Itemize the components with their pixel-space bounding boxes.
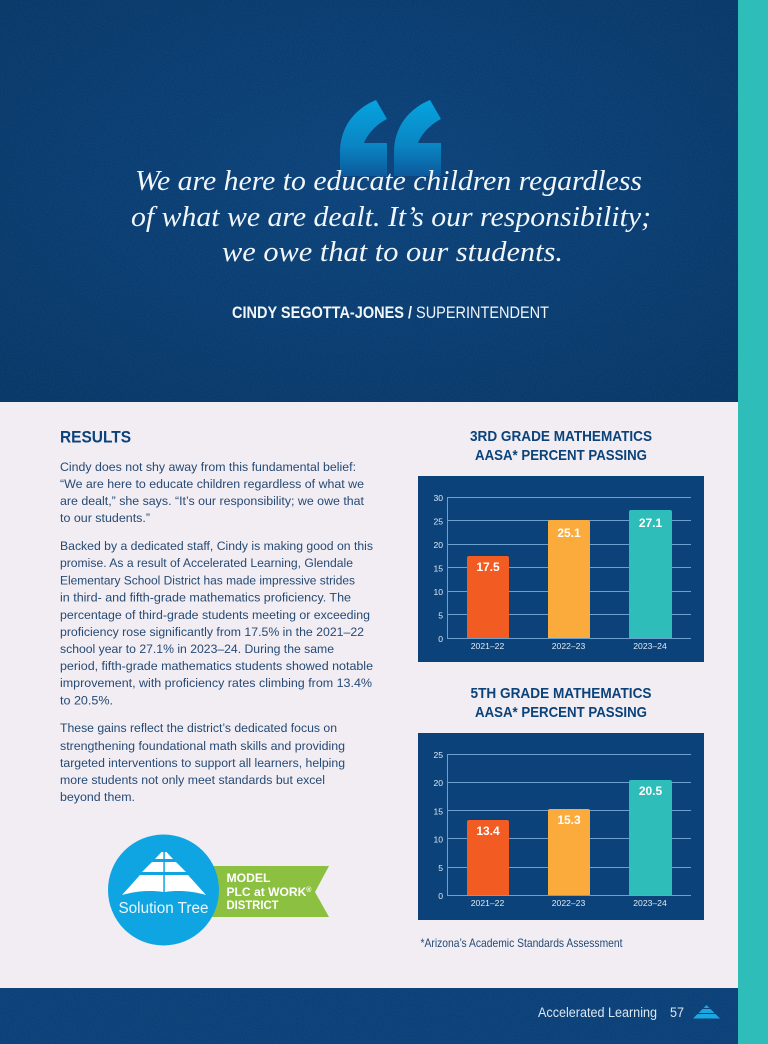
quote text: we owe that to our students. [222,236,563,268]
text block: results body: are dealt,” she says. “It’s our responsibility; we owe that [60,494,365,508]
text block: results body: more students not only meet standards but excel [60,773,325,787]
text block: results body: school year to 27.1% in 2023–24. During the same [60,642,334,656]
ribbon text: DISTRICT [226,898,279,912]
bar: 2023–24 [629,780,672,895]
bar: 2022–23: 15.3 [557,813,581,827]
blue circle [108,834,219,946]
bar: 2023–24: 27.1 [639,516,663,530]
text block: results body: “We are here to educate children regardless of what we [60,477,364,491]
text block: results body: promise. As a result of Accelerated Learning, Glendale [60,556,353,570]
bar chart: 3rd grade: 5 [438,610,443,620]
text block: results body: percentage of third-grade students meeting or exceeding [60,608,370,622]
bar: 2021–22: 17.5 [476,560,500,574]
text block: results body: improvement, with proficiency rates climbing from 13.4% [60,676,372,690]
text block: results body: in third- and fifth-grade mathematics proficiency. The [60,590,351,604]
bar chart: 3rd grade: 20 [433,540,443,550]
bar chart: 5th grade: 5 [438,863,443,873]
bar chart: 3rd grade: 2023–24 [633,641,667,651]
heading: 5th grade chart: 5TH GRADE MATHEMATICS [470,685,652,702]
text block: results body: to our students.” [60,511,150,525]
quote text: We are here to educate children regardless [135,165,642,197]
text block: results body: beyond them. [60,790,135,804]
teal side band [738,0,768,1044]
heading: 3rd grade chart: AASA* PERCENT PASSING [475,447,647,464]
bar chart: 3rd grade [418,476,704,662]
text block: results body: Cindy does not shy away from this fundamental belief: [60,460,356,474]
green ribbon [210,866,329,917]
text block: results body: to 20.5%. [60,694,113,708]
text block: results body: period, fifth-grade mathematics students showed notable [60,659,373,673]
text block: results body: Backed by a dedicated staff, Cindy is making good on this [60,539,373,553]
footer bar [0,988,738,1044]
ribbon text: PLC at WORK [226,885,306,899]
panel: quote [0,0,738,402]
bar: 2022–23 [548,809,590,895]
bar: 2021–22 [467,556,509,638]
bar chart: 3rd grade: 0 [438,634,443,644]
ribbon text [226,871,312,912]
heading: 5th grade chart: AASA* PERCENT PASSING [475,704,647,721]
text block: results body: These gains reflect the district’s dedicated focus on [60,721,337,735]
heading: 3rd grade chart [470,428,652,464]
bar chart: 3rd grade: 2022–23 [552,641,585,651]
bar chart: 5th grade: 15 [433,806,443,816]
text block: results body [60,460,373,804]
icon: quotation marks [340,100,441,176]
badge: Solution Tree Model PLC at Work District [108,834,329,946]
bar chart: 5th grade: 20 [433,778,443,788]
bar chart: 5th grade [418,733,704,920]
bar: 2023–24 [629,510,672,638]
bar chart: 5th grade: 2022–23 [552,898,585,908]
bar: 2022–23: 25.1 [557,526,581,540]
text block: results body: Elementary School District has made impressive strides [60,574,355,588]
text block: results body: strengthening foundational math skills and providing [60,739,345,753]
bar: 2022–23 [548,520,590,638]
text block: results body: targeted interventions to support all learners, helping [60,756,345,770]
icon: footer tree [693,1005,720,1018]
bar chart: 3rd grade: 2021–22 [471,641,504,651]
bar: 2023–24: 20.5 [639,784,663,798]
ribbon text: MODEL [226,871,270,885]
bar chart: 5th grade: 2021–22 [471,898,504,908]
bar chart: 3rd grade: 15 [433,564,443,574]
text block: results body: proficiency rose significantly from 17.5% in the 2021–22 [60,625,364,639]
quote attribution: CINDY SEGOTTA-JONES / SUPERINTENDENT [232,303,549,322]
heading: results: RESULTS [60,428,131,446]
bar chart: 3rd grade: 10 [433,587,443,597]
footnote: *Arizona’s Academic Standards Assessment [420,936,623,950]
heading: 5th grade chart [470,685,652,721]
heading: 3rd grade chart: 3RD GRADE MATHEMATICS [470,428,652,445]
bar chart: 5th grade: 0 [438,891,443,901]
quote text: of what we are dealt. It’s our responsibility; [131,201,651,233]
bar chart: 5th grade: 2023–24 [633,898,667,908]
bar chart: 5th grade: 10 [433,834,443,844]
bar: 2021–22: 13.4 [476,824,500,838]
bar chart: 5th grade: 25 [433,750,443,760]
bar chart: 3rd grade: 25 [433,516,443,526]
bar chart: 3rd grade: 30 [433,493,443,503]
page number: 57 [670,1005,684,1020]
ribbon text: ® [306,886,312,894]
footer label: Accelerated Learning [538,1005,657,1020]
icon: tree book [122,852,206,895]
quote text [131,165,651,268]
bar: 2021–22 [467,820,509,895]
logo wordmark: Solution Tree [118,900,208,917]
